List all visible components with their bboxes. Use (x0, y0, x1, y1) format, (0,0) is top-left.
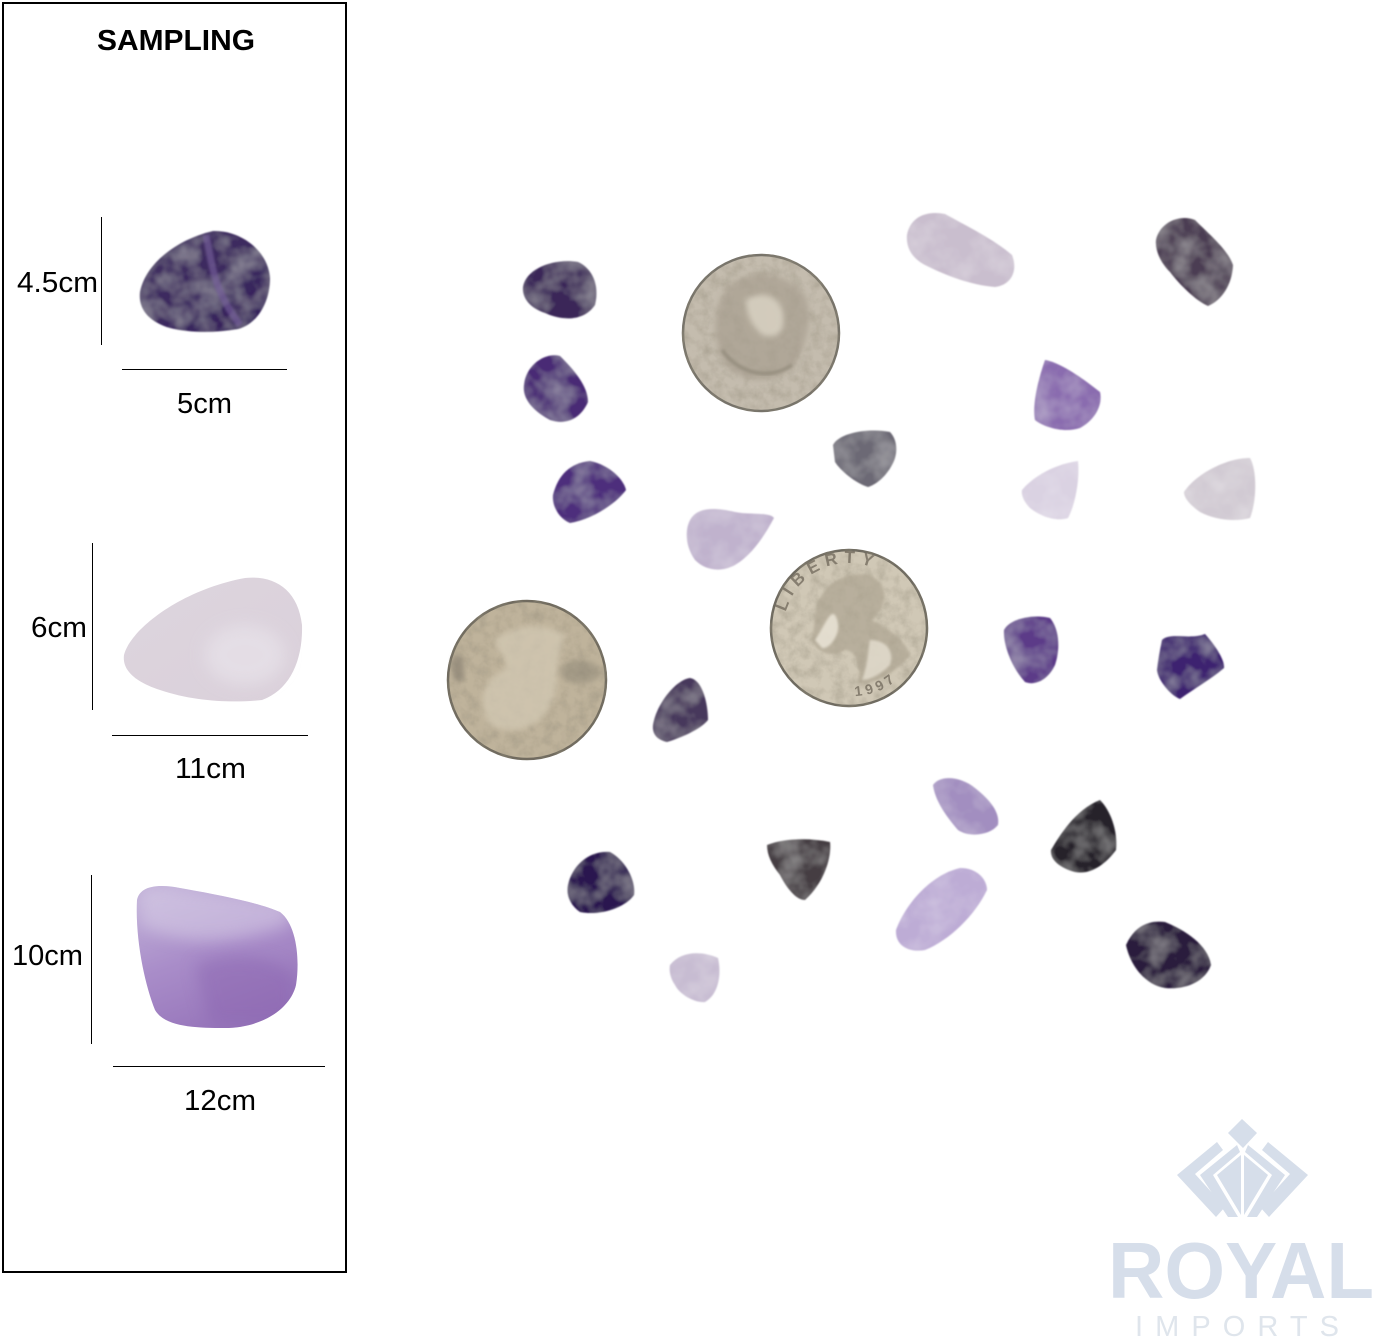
dimension: 5cm width: 5cm (177, 388, 232, 420)
stone 4 (687, 509, 774, 570)
stone 17 (767, 839, 830, 900)
stone 15 (1051, 800, 1116, 873)
logo: royal imports (1108, 1119, 1373, 1339)
dimension: 6cm height: 6cm (31, 612, 87, 644)
coin date: 1997 (855, 674, 892, 696)
loose stones group (523, 213, 1255, 1002)
dimension: 11cm width: 11cm (175, 753, 246, 785)
icon: crown (1177, 1119, 1308, 1217)
dimension: 12cm width: 12cm (184, 1085, 256, 1117)
sample 1: dark amethyst (140, 231, 270, 332)
stone 20 (1126, 922, 1211, 988)
stone 5 (833, 431, 896, 487)
coin: quarter, reverse upper (683, 255, 839, 411)
stone 18 (896, 868, 987, 951)
stone 13 (653, 678, 708, 742)
dimension: 10cm height: 10cm (12, 940, 83, 972)
dimension: 4.5cm height (17, 217, 102, 345)
dimension: 4.5cm height: 4.5cm (17, 267, 98, 299)
stone 10 (1184, 458, 1255, 520)
coin lettering: LIBERTY (775, 551, 874, 611)
sample 3: banded amethyst (137, 885, 298, 1028)
stone 9 (1022, 461, 1078, 519)
coin: quarter, worn (448, 601, 606, 759)
stone 3 (553, 461, 626, 523)
logo wordmark: ROYAL (1108, 1226, 1373, 1315)
stone 2 (524, 355, 588, 422)
stone 6 (907, 213, 1014, 287)
panel: sampling (3, 3, 346, 1272)
stone 11 (1004, 616, 1058, 683)
stone 8 (1034, 360, 1101, 430)
stone 12 (1157, 634, 1224, 699)
stone 1 (523, 261, 596, 318)
stone 14 (933, 778, 998, 835)
stone 16 (568, 852, 634, 913)
coin: quarter, liberty portrait (770, 548, 928, 708)
sample 2: pale amethyst (124, 578, 302, 701)
heading: sampling: SAMPLING (97, 25, 255, 57)
stone 19 (670, 953, 719, 1002)
stone 7 (1156, 218, 1233, 306)
